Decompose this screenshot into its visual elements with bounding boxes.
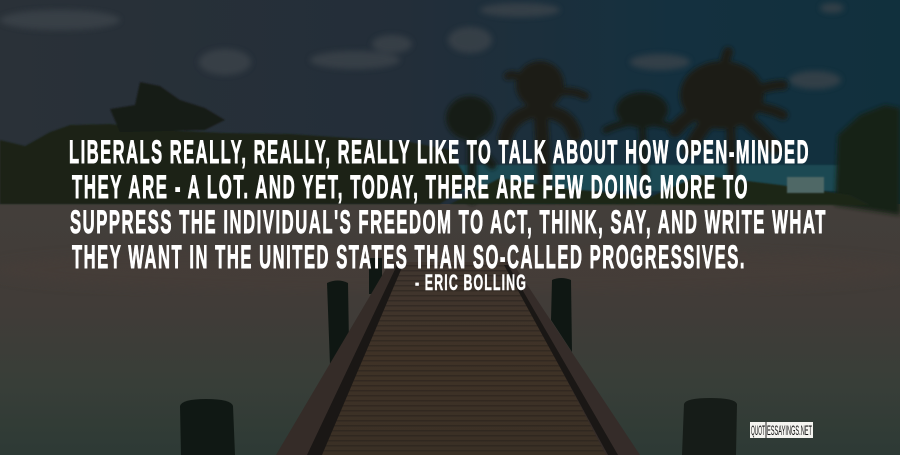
boardwalk deck — [276, 262, 640, 455]
post: mid left — [327, 280, 349, 365]
palm trees — [446, 52, 783, 200]
clouds — [0, 3, 844, 89]
attribution: - ERIC BOLLING — [415, 270, 527, 295]
post: rear left — [369, 258, 382, 294]
post: near right — [682, 398, 737, 455]
palm 2 — [505, 61, 585, 190]
watermark: QUOT — [751, 422, 765, 438]
rail shadow left — [307, 265, 403, 455]
sand tint — [0, 248, 900, 292]
trees right — [835, 105, 900, 215]
watermark — [750, 422, 813, 438]
palm 3 — [606, 92, 682, 190]
shrubs — [450, 175, 870, 205]
palm 4 — [675, 52, 783, 195]
deck left rail — [276, 262, 398, 455]
palm 1 — [446, 96, 494, 200]
post: mid right — [551, 278, 572, 352]
rail shadow right — [504, 265, 618, 455]
distant shore — [787, 177, 824, 193]
quote text — [69, 134, 827, 275]
sea strip — [450, 165, 850, 191]
quote card: ESSAYINGS.NET — [767, 422, 812, 438]
background: sand — [0, 204, 900, 455]
post: near left — [180, 399, 235, 455]
trees left — [0, 82, 470, 204]
background: sky — [0, 0, 900, 210]
deck right rail — [505, 262, 640, 455]
rear posts — [327, 258, 572, 365]
